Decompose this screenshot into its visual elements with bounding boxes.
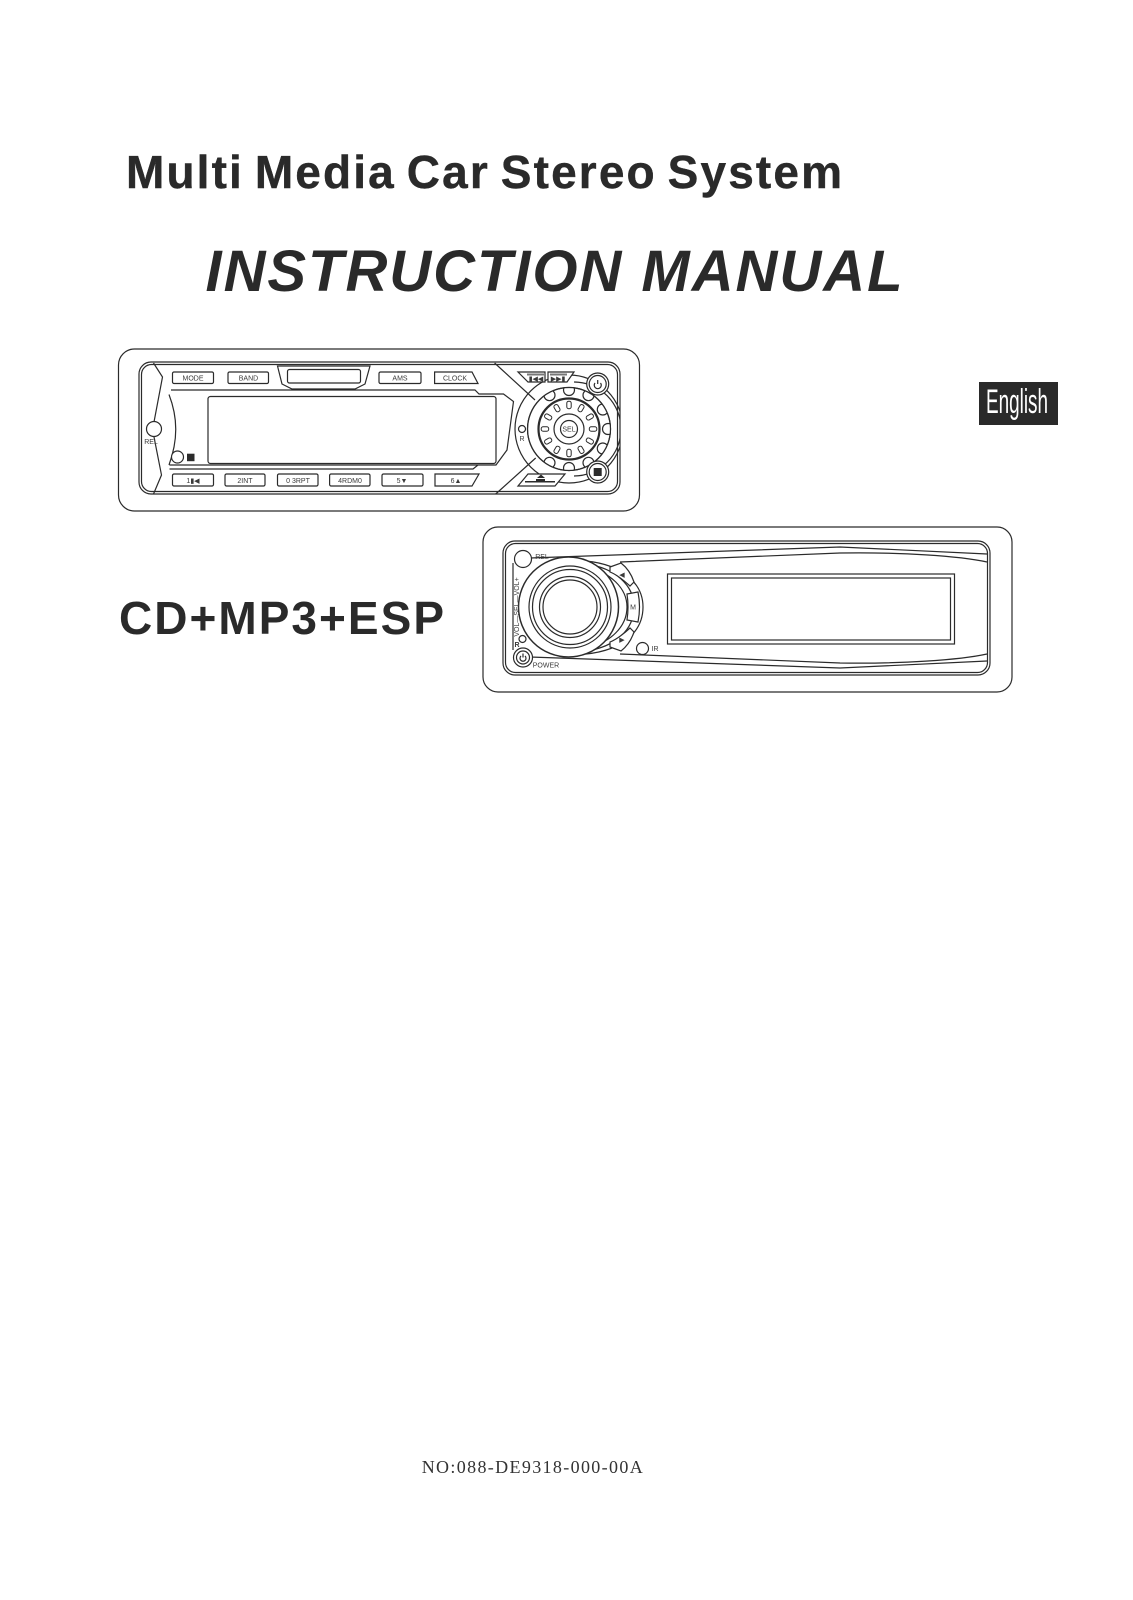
power button: [514, 648, 559, 670]
bottom row preset buttons: 4RDM0: [338, 478, 362, 485]
IR sensor: IR: [652, 646, 658, 653]
upper button: ◀: [619, 572, 625, 579]
eject button: [518, 474, 565, 486]
diagram: front-panel stereo faceplate: [118, 349, 640, 511]
REL button: REL: [144, 439, 158, 446]
left edge rail: [512, 563, 514, 650]
M button: [627, 592, 640, 622]
top row buttons: MODE: [182, 376, 204, 382]
top row buttons: [172, 372, 478, 384]
lower sweep lines: [530, 654, 987, 668]
rotary knob: [518, 557, 618, 657]
lower button: [610, 628, 634, 651]
track skip buttons: ▮◀◀: [529, 376, 544, 383]
faceplate outer housing: [483, 527, 1012, 692]
M button: M: [630, 604, 636, 612]
faceplate inner frame: [503, 541, 990, 675]
top row buttons: AMS: [392, 376, 408, 382]
faceplate outer housing: [118, 349, 640, 511]
faceplate inner frame: [139, 362, 620, 494]
model label: CD+MP3+ESP: CD+MP3+ESP: [119, 592, 444, 644]
REL button: REL: [535, 554, 549, 561]
bottom row preset buttons: 5▼: [397, 478, 407, 485]
display surround bracket: [169, 390, 514, 469]
track skip buttons: [518, 372, 574, 383]
upper sweep lines: [530, 547, 987, 562]
bottom row preset buttons: [172, 474, 479, 486]
rotary labels: VOL—SEL—VOL+: [514, 577, 521, 637]
IR sensor: [172, 451, 194, 463]
control wheel: [495, 363, 623, 494]
bottom row preset buttons: 6▲: [451, 478, 461, 485]
diagram: rotary-knob stereo faceplate: [483, 527, 1012, 692]
REL button: [144, 422, 162, 446]
top row buttons: BAND: [239, 376, 258, 382]
card slot: [278, 366, 370, 389]
lower button: ▶: [619, 637, 625, 644]
bottom row preset buttons: 0 3RPT: [286, 478, 311, 485]
R reset button: R: [519, 436, 525, 443]
part number: NO:088-DE9318-000-00A: [422, 1457, 643, 1477]
title: Multi Media Car Stereo System: Multi Media Car Stereo System: [126, 146, 842, 198]
power button: POWER: [533, 662, 559, 670]
R reset button: R: [514, 642, 520, 649]
left release flap: [154, 363, 162, 494]
mute button: [587, 461, 609, 483]
track skip buttons: ▶▶▮: [551, 376, 565, 383]
control wheel: SEL: [562, 426, 576, 434]
badge: English: [979, 382, 1058, 425]
upper button: [610, 563, 634, 586]
REL button: [514, 550, 549, 568]
bottom row preset buttons: 2INT: [237, 478, 253, 485]
R reset button: [514, 636, 526, 649]
IR sensor: [636, 642, 658, 654]
LCD display: [668, 574, 954, 644]
bottom row preset buttons: 1▮◀: [186, 478, 200, 485]
top row buttons: CLOCK: [443, 376, 467, 382]
badge: English: English: [986, 383, 1048, 421]
R reset button: [518, 426, 526, 443]
knob backing arcs: [586, 561, 643, 654]
power button: [587, 373, 609, 395]
LCD display: [208, 396, 496, 464]
heading: INSTRUCTION MANUAL: INSTRUCTION MANUAL: [206, 239, 902, 304]
